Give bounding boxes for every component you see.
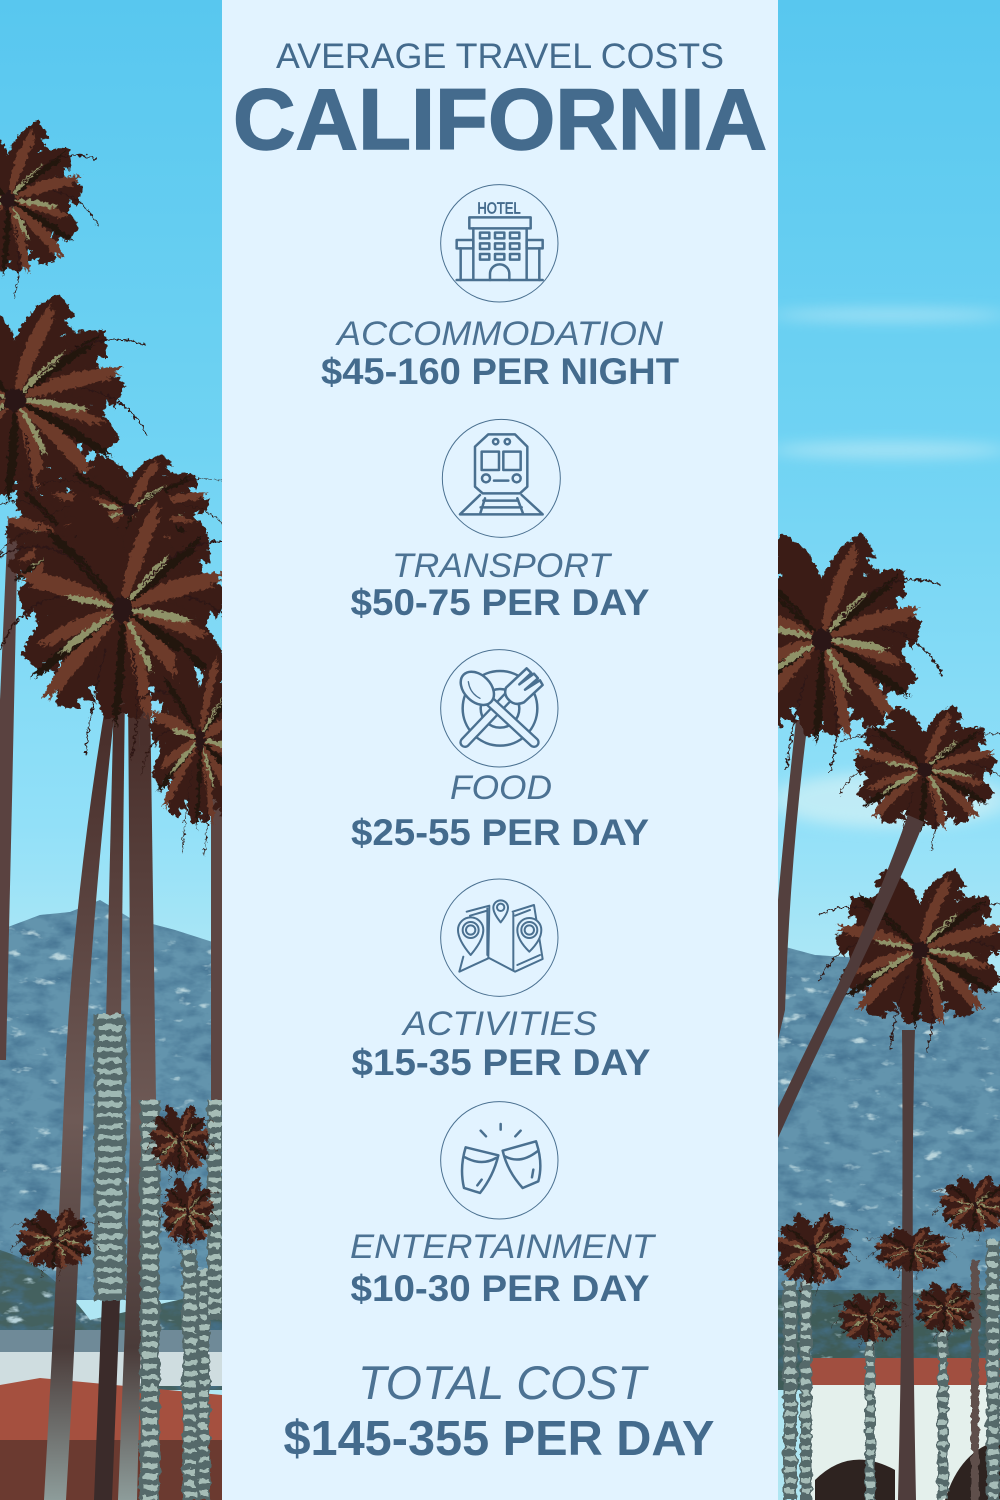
background photo: mountains [0,900,1000,1390]
value: activities cost: $15-35 PER DAY [352,1042,651,1083]
value: transport cost: $50-75 PER DAY [350,582,650,623]
label: activities: ACTIVITIES [401,1005,597,1043]
icon: food [441,650,558,767]
icon: train [442,419,560,537]
value: total cost: $145-355 PER DAY [284,1412,714,1466]
value: entertainment cost: $10-30 PER DAY [350,1268,650,1309]
background photo: right palm crowns [704,525,1000,1350]
background photo: left palm trunks [0,520,222,1500]
value: food cost: $25-55 PER DAY [351,812,649,853]
heading: average travel costs: AVERAGE TRAVEL COSTS [276,37,724,76]
background photo: leaning palm trunk [778,815,924,1138]
icon: map [441,879,558,996]
icon: hotel: HOTEL [477,201,521,218]
background photo: right lower buildings [805,1358,1000,1500]
background photo: left houses and roofs [0,1330,222,1500]
background photo: clouds on the right [770,309,1000,828]
label: entertainment: ENTERTAINMENT [350,1228,656,1266]
label: accommodation: ACCOMMODATION [335,315,663,353]
background photo: right palm trunks [778,720,993,1500]
icon: hotel [441,185,558,302]
label: total cost: TOTAL COST [358,1356,649,1409]
value: accommodation cost: $45-160 PER NIGHT [321,351,679,392]
heading: california: CALIFORNIA [233,72,767,168]
background photo: left palm crowns [0,115,260,1279]
center panel [222,0,778,1500]
label: food: FOOD [450,769,552,807]
label: transport: TRANSPORT [392,547,612,585]
icon: drinks [441,1102,558,1219]
